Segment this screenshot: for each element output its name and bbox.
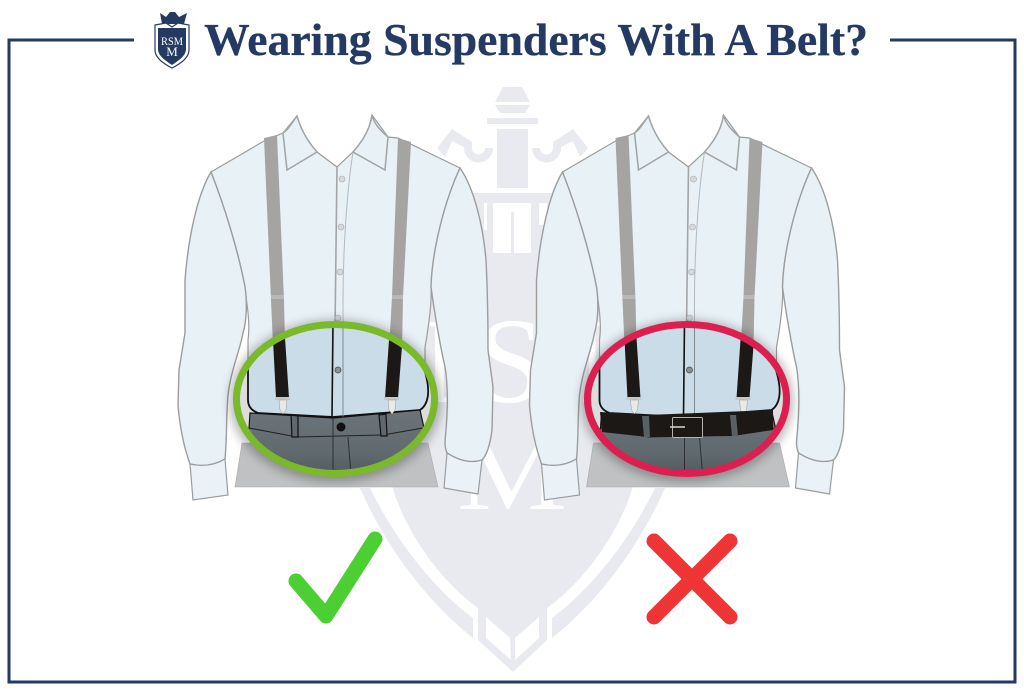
- title: Wearing Suspenders With A Belt?: [204, 15, 868, 65]
- watermark letters: S: [477, 294, 545, 429]
- logo crest: [155, 12, 189, 68]
- watermark letters: M: [543, 294, 603, 429]
- shirt figure: suspenders only: [178, 115, 493, 500]
- trouser belt loops and button: [291, 414, 387, 437]
- highlight shadow left: [230, 320, 442, 482]
- highlight shadow right: [581, 320, 793, 482]
- watermark crest: [360, 87, 665, 672]
- magnified waist: trousers with no belt: [240, 328, 431, 470]
- shirt figure: suspenders with belt: [530, 115, 844, 500]
- magnified waist: belt worn: [591, 328, 783, 470]
- watermark letters: M: [457, 411, 567, 533]
- red highlight ellipse: [588, 324, 786, 474]
- watermark letters: [425, 294, 603, 533]
- belt buckle: [670, 418, 702, 438]
- icon: red cross: [654, 541, 730, 617]
- icon: green check mark: [296, 539, 375, 616]
- logo crest: RSM: [161, 34, 183, 48]
- green highlight ellipse: [236, 324, 434, 474]
- watermark letters: R: [425, 294, 485, 429]
- logo crest: M: [166, 44, 178, 59]
